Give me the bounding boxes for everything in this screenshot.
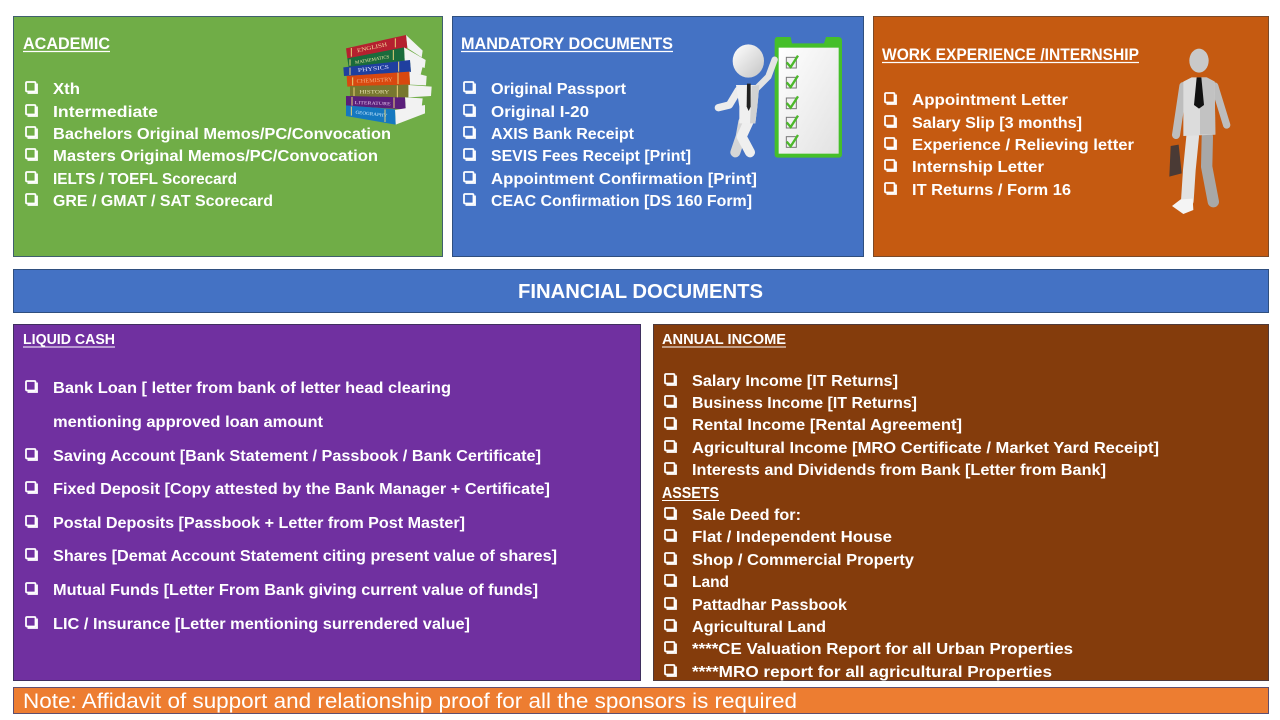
list: assets bbox=[665, 507, 1073, 681]
list: liquid cash documents bbox=[26, 380, 557, 633]
list: work documents: Salary Slip [3 months] bbox=[912, 115, 1082, 132]
list: academic documents bbox=[26, 81, 391, 210]
list: academic documents: Bachelors Original Memos/PC/Convocation bbox=[53, 126, 391, 143]
list: assets: ****CE Valuation Report for all Urban Properties bbox=[692, 641, 1073, 658]
icon: walking businessman bbox=[1169, 49, 1227, 214]
list: assets: ****MRO report for all agricultural Properties bbox=[692, 664, 1052, 681]
panel: work experience / internship bbox=[874, 16, 1268, 256]
list: mandatory documents: AXIS Bank Receipt bbox=[491, 126, 635, 143]
list: annual income: Business Income [IT Returns] bbox=[692, 395, 917, 412]
icon: person with checklist bbox=[718, 37, 842, 158]
list: work documents: Appointment Letter bbox=[912, 92, 1068, 109]
list: mandatory documents bbox=[464, 81, 757, 210]
list: mandatory documents: CEAC Confirmation [DS 160 Form] bbox=[491, 193, 752, 210]
list: liquid cash documents: LIC / Insurance [Letter mentioning surrendered value] bbox=[53, 616, 470, 633]
heading: mandatory documents: MANDATORY DOCUMENTS bbox=[461, 35, 673, 53]
list: academic documents: Intermediate bbox=[53, 104, 158, 121]
list: academic documents: Masters Original Memos/PC/Convocation bbox=[53, 148, 378, 165]
note: affidavit of support bbox=[14, 688, 1268, 714]
list: academic documents: GRE / GMAT / SAT Scorecard bbox=[53, 193, 273, 210]
list: mandatory documents: SEVIS Fees Receipt [Print] bbox=[491, 148, 691, 165]
panel: mandatory documents bbox=[452, 16, 864, 256]
icon: stack of books: LITERATURE bbox=[355, 101, 391, 107]
list: liquid cash documents: Shares [Demat Account Statement citing present value of shares] bbox=[53, 548, 557, 565]
list: mandatory documents: Original Passport bbox=[491, 81, 627, 98]
list: work documents: Internship Letter bbox=[912, 159, 1044, 176]
list: mandatory documents: Original I-20 bbox=[491, 104, 589, 121]
list: annual income: Salary Income [IT Returns] bbox=[692, 373, 898, 390]
list: annual income bbox=[665, 373, 1159, 479]
list: work documents: Experience / Relieving letter bbox=[912, 137, 1134, 154]
list: liquid cash documents: mentioning approved loan amount bbox=[53, 414, 324, 431]
list: academic documents: Xth bbox=[53, 81, 80, 98]
banner: financial documents: FINANCIAL DOCUMENTS bbox=[518, 281, 763, 303]
list: assets: Sale Deed for: bbox=[692, 507, 801, 524]
list: liquid cash documents: Saving Account [Bank Statement / Passbook / Bank Certificate] bbox=[53, 448, 541, 465]
icon: stack of books: ENGLISH bbox=[357, 42, 388, 54]
panel: academic bbox=[14, 16, 442, 256]
heading: assets: ASSETS bbox=[662, 485, 719, 502]
banner: financial documents bbox=[14, 270, 1268, 312]
list: annual income: Rental Income [Rental Agreement] bbox=[692, 417, 962, 434]
panel: liquid cash bbox=[14, 324, 640, 680]
list: academic documents: IELTS / TOEFL Scorecard bbox=[53, 171, 237, 188]
heading: academic: ACADEMIC bbox=[23, 35, 110, 53]
list: liquid cash documents: Bank Loan [ letter from bank of letter head clearing bbox=[53, 380, 451, 397]
list: liquid cash documents: Mutual Funds [Letter From Bank giving current value of funds] bbox=[53, 582, 538, 599]
note: affidavit of support: Note: Affidavit of support and relationship proof for all the sponsors is required bbox=[23, 690, 797, 713]
list: assets: Land bbox=[692, 574, 729, 591]
list: work documents: IT Returns / Form 16 bbox=[912, 182, 1071, 199]
heading: annual income: ANNUAL INCOME bbox=[662, 332, 786, 348]
heading: work experience: WORK EXPERIENCE /INTERNSHIP bbox=[882, 46, 1139, 64]
icon: stack of books: GEOGRAPHY bbox=[355, 111, 388, 119]
icon: stack of books: CHEMISTRY bbox=[356, 77, 393, 85]
list: liquid cash documents: Fixed Deposit [Copy attested by the Bank Manager + Certificate] bbox=[53, 481, 550, 498]
list: annual income: Agricultural Income [MRO Certificate / Market Yard Receipt] bbox=[692, 440, 1159, 457]
heading: liquid cash: LIQUID CASH bbox=[23, 332, 115, 348]
list: liquid cash documents: Postal Deposits [Passbook + Letter from Post Master] bbox=[53, 515, 465, 532]
list: work documents bbox=[885, 92, 1134, 199]
list: assets: Agricultural Land bbox=[692, 619, 826, 636]
icon: stack of books bbox=[343, 35, 432, 125]
list: assets: Pattadhar Passbook bbox=[692, 597, 847, 614]
list: mandatory documents: Appointment Confirmation [Print] bbox=[491, 171, 757, 188]
icon: stack of books: HISTORY bbox=[359, 89, 389, 95]
list: assets: Shop / Commercial Property bbox=[692, 552, 914, 569]
icon: stack of books: PHYSICS bbox=[358, 65, 389, 74]
list: assets: Flat / Independent House bbox=[692, 529, 892, 546]
panel: annual income and assets bbox=[654, 324, 1268, 681]
list: annual income: Interests and Dividends from Bank [Letter from Bank] bbox=[692, 462, 1106, 479]
icon: stack of books: MATHEMATICS bbox=[355, 55, 390, 66]
